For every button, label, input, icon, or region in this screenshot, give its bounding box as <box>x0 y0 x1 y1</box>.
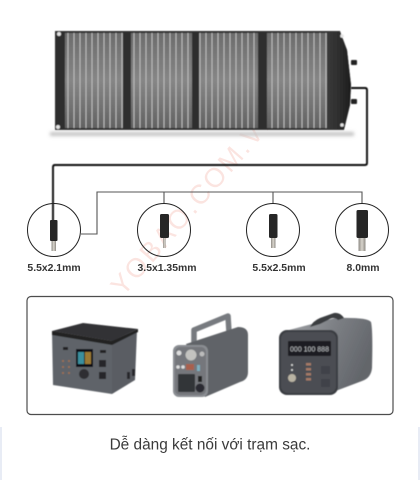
label: 5.5x2.5mm <box>252 263 306 274</box>
display <box>288 341 331 356</box>
indicator dots <box>291 364 293 371</box>
outlet panel <box>178 374 195 392</box>
device: power station 3 <box>279 313 372 395</box>
device: power station 2 <box>173 316 248 397</box>
solar cell 3 <box>199 33 258 128</box>
panel: power stations frame <box>27 296 393 414</box>
connector: 5.5x2.1mm <box>27 204 81 274</box>
solar panel <box>50 31 357 136</box>
body front <box>173 345 208 397</box>
usb ports <box>306 363 311 380</box>
panel shadow <box>50 132 354 136</box>
outlets <box>321 366 330 387</box>
gray connector lines <box>81 192 362 234</box>
power button <box>288 374 296 382</box>
solar cell 1 <box>65 33 123 128</box>
body side and top <box>285 318 372 395</box>
round gauge <box>186 350 196 360</box>
connector: 8.0mm <box>336 204 388 274</box>
connector: 5.5x2.5mm <box>246 204 306 274</box>
black cable <box>53 88 367 222</box>
side ports <box>127 372 130 379</box>
front controls <box>79 369 89 379</box>
black lid <box>52 323 138 341</box>
panel body <box>55 31 351 130</box>
solar cell 2 <box>131 33 192 128</box>
middle port row <box>186 364 194 370</box>
label: 3.5x1.35mm <box>138 263 196 274</box>
panel eyelets <box>56 32 344 129</box>
handle <box>310 313 344 327</box>
label: 5.5x2.1mm <box>27 263 81 274</box>
device: power station 1 <box>52 323 138 394</box>
display <box>76 349 93 367</box>
bottom caption band <box>0 427 420 480</box>
watermark: YOBAO.COM.VN <box>105 100 285 301</box>
caption: Dễ dàng kết nối với trạm sạc. <box>110 436 310 454</box>
handle <box>194 316 229 345</box>
display readout: 000 100 888 <box>290 346 329 354</box>
panel side ports <box>351 60 357 104</box>
body front <box>52 331 112 394</box>
solar cell 4 <box>267 33 327 128</box>
body side <box>186 327 248 397</box>
label: 8.0mm <box>347 263 379 274</box>
body front <box>279 330 338 395</box>
panel right flap <box>327 32 351 129</box>
body side <box>111 330 137 394</box>
connector: 3.5x1.35mm <box>138 204 196 274</box>
